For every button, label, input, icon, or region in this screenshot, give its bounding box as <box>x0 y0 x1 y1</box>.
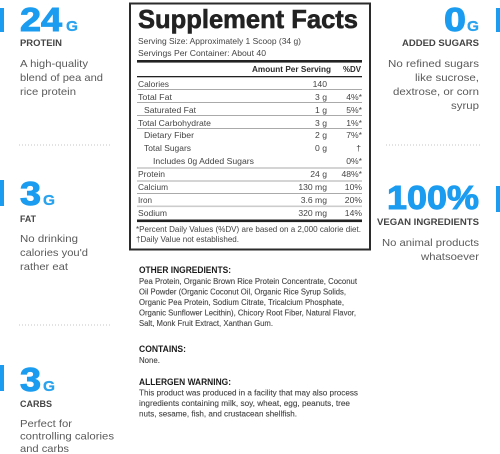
nutrition rows: † <box>356 143 361 153</box>
nutrition rows: 5%* <box>346 105 363 115</box>
serving information: Serving Size: Approximately 1 Scoop (34 g) <box>138 36 301 46</box>
stat: 100% vegan ingredients: whatsoever <box>420 251 480 263</box>
stat: 3g carbs: controlling calories <box>20 430 114 442</box>
stat: 24g protein: PROTEIN <box>20 38 62 48</box>
text block: other ingredients: Oil Powder (Organic Coconut Oil, Organic Rice Syrup Solids, <box>139 286 346 296</box>
nutrition rows: 140 <box>313 79 327 89</box>
stat: 0g added sugars: No refined sugars <box>388 58 479 70</box>
stat: 0g added sugars: dextrose, or corn <box>393 86 479 98</box>
nutrition rows: 10% <box>345 182 362 192</box>
stat: 100% vegan ingredients: VEGAN INGREDIENTS <box>377 217 479 227</box>
text block: contains: None. <box>139 355 160 365</box>
nutrition rows: Protein <box>138 169 165 179</box>
stat: 0g added sugars <box>388 1 500 112</box>
stat: 24g protein <box>0 1 103 98</box>
nutrition rows <box>137 79 363 218</box>
nutrition rows: Iron <box>138 195 152 205</box>
nutrition rows: 20% <box>345 195 362 205</box>
stat: 0g added sugars: G <box>467 18 479 35</box>
text block: contains: CONTAINS: <box>139 344 186 354</box>
stat: 3g fat: FAT <box>20 214 36 224</box>
text block: allergen warning: ingredients containing milk, soy, wheat, egg, peanuts, tree <box>139 398 350 408</box>
stat: 0g added sugars: like sucrose, <box>415 72 479 84</box>
stat: 3g carbs: 3 <box>20 361 41 398</box>
stat: 24g protein: G <box>66 18 78 35</box>
stat: 3g fat <box>0 175 88 273</box>
footnotes: *Percent Daily Values (%DV) are based on a 2,000 calorie diet. <box>136 224 361 234</box>
nutrition rows: 14% <box>345 208 362 218</box>
nutrition rows: Total Carbohydrate <box>138 118 211 128</box>
nutrition rows: 1 g <box>315 105 327 115</box>
nutrition rows: 7%* <box>346 130 363 140</box>
serving information <box>138 36 301 58</box>
nutrition rows: Total Fat <box>138 92 173 102</box>
nutrition rows: Calcium <box>138 182 168 192</box>
stat: 3g fat: rather eat <box>20 261 68 273</box>
text block: other ingredients: Salt, Monk Fruit Extract, Xanthan Gum. <box>139 318 273 328</box>
nutrition rows: Includes 0g Added Sugars <box>153 156 254 166</box>
nutrition rows: 2 g <box>315 130 327 140</box>
text block: other ingredients: OTHER INGREDIENTS: <box>139 265 231 275</box>
nutrition rows: 3 g <box>315 118 327 128</box>
stat: 3g carbs: Perfect for <box>20 418 73 430</box>
nutrition rows: Dietary Fiber <box>144 130 194 140</box>
stat: 24g protein: rice protein <box>20 86 76 98</box>
serving information: Servings Per Container: About 40 <box>138 48 266 58</box>
stat: 3g fat: calories you'd <box>20 247 88 259</box>
table header: %DV <box>343 64 361 74</box>
stat: 3g carbs: G <box>43 378 55 395</box>
stat: 100% vegan ingredients: No animal products <box>382 237 479 249</box>
stat: 0g added sugars: ADDED SUGARS <box>402 38 479 48</box>
text block: other ingredients <box>139 265 358 328</box>
stat: 0g added sugars: 0 <box>444 1 466 38</box>
table header: Amount Per Serving <box>252 64 331 74</box>
stat: 24g protein: 24 <box>20 1 63 38</box>
nutrition rows: 4%* <box>346 92 363 102</box>
nutrition rows: 3.6 mg <box>301 195 327 205</box>
nutrition rows: 0%* <box>346 156 363 166</box>
text block: other ingredients: Organic Sunflower Lecithin), Chicory Root Fiber, Natural Flavor, <box>139 308 356 318</box>
stat: 0g added sugars: syrup <box>451 100 479 112</box>
stat: 3g carbs <box>0 361 114 454</box>
nutrition rows: Calories <box>138 79 169 89</box>
text block: allergen warning <box>139 377 358 418</box>
footnotes: †Daily Value not established. <box>136 234 239 244</box>
heading: supplement facts: Supplement Facts <box>138 4 358 34</box>
stat: 3g fat: G <box>43 192 55 209</box>
text block: allergen warning: nuts, sesame, fish, and crustacean shellfish. <box>139 408 297 418</box>
nutrition rows: 24 g <box>310 169 327 179</box>
stat: 3g fat: 3 <box>20 175 41 212</box>
stat: 100% vegan ingredients <box>377 179 500 263</box>
nutrition rows: Sodium <box>138 208 167 218</box>
text block: other ingredients: Pea Protein, Organic Brown Rice Protein Concentrate, Coconut <box>139 276 358 286</box>
stat: 24g protein: A high-quality <box>20 58 89 70</box>
text block: contains <box>139 344 186 365</box>
nutrition rows: 320 mg <box>298 208 327 218</box>
stat: 3g fat: No drinking <box>20 233 78 245</box>
nutrition rows: 0 g <box>315 143 327 153</box>
text block: other ingredients: Organic Pea Protein, Sodium Citrate, Tricalcium Phosphate, <box>139 297 344 307</box>
footnotes <box>136 224 361 244</box>
stat: 100% vegan ingredients: 100% <box>387 179 479 216</box>
nutrition rows: 130 mg <box>298 182 327 192</box>
stat: 24g protein: blend of pea and <box>20 72 103 84</box>
stat: 3g carbs: CARBS <box>20 399 52 409</box>
nutrition rows: Saturated Fat <box>144 105 197 115</box>
text block: allergen warning: ALLERGEN WARNING: <box>139 377 231 387</box>
nutrition rows: Total Sugars <box>144 143 191 153</box>
text block: allergen warning: This product was produced in a facility that may also process <box>139 388 358 398</box>
nutrition rows: 48%* <box>341 169 363 179</box>
nutrition rows: 3 g <box>315 92 327 102</box>
nutrition rows: 1%* <box>346 118 363 128</box>
panel: supplement facts <box>130 4 370 250</box>
